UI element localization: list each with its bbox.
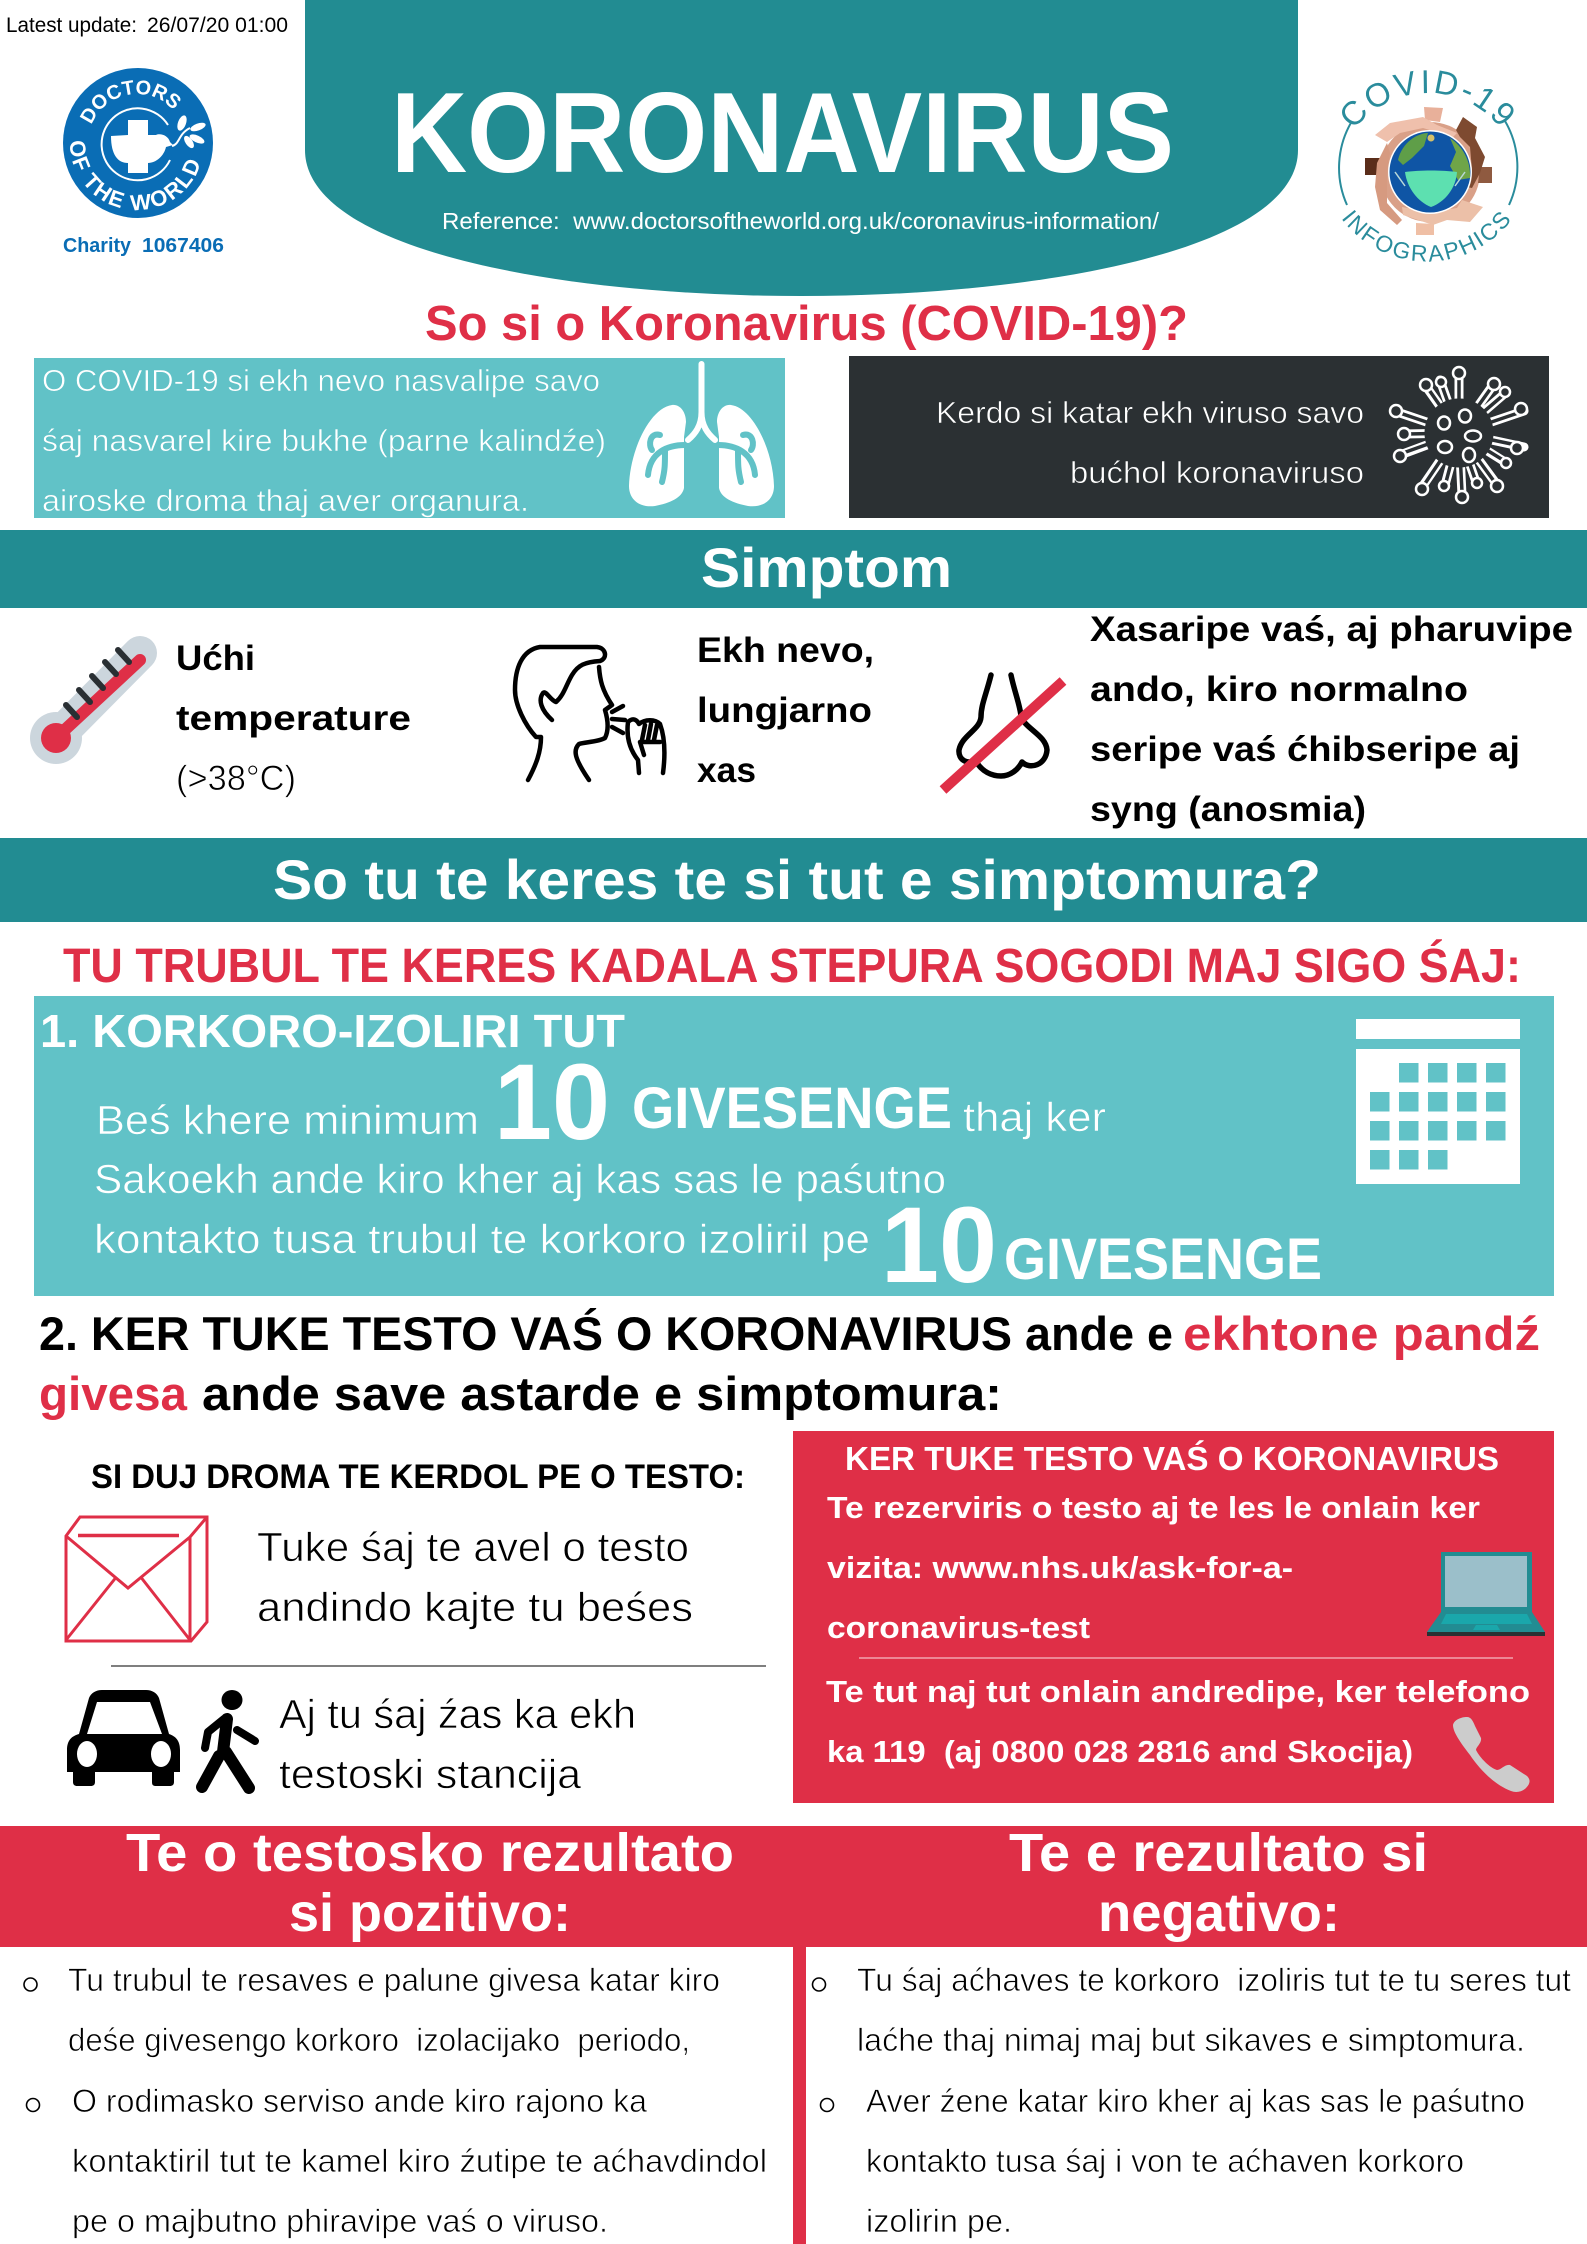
text block: negative result advice: kontakto tusa śaj i von te aćhaven korkoro	[866, 2143, 1464, 2179]
text: virus family: bućhol koronaviruso	[1070, 455, 1364, 490]
text: virus family: Kerdo si katar ekh viruso savo	[936, 395, 1364, 430]
text: loss of smell: syng (anosmia)	[1090, 790, 1366, 829]
latest update timestamp: 26/07/20 01:00	[147, 14, 288, 37]
charity number: 1067406	[142, 235, 224, 257]
text: phone 119	[826, 1674, 1530, 1769]
text: new cough: lungjarno	[697, 691, 872, 730]
text: high temperature: temperature	[176, 699, 411, 738]
step 1 text line 1: GIVESENGE	[632, 1076, 952, 1141]
text: home test: Tuke śaj te avel o testo	[257, 1524, 689, 1570]
reference line: Reference: www.doctorsoftheworld.org.uk/coronavirus-information/	[442, 208, 1160, 234]
panel: definition	[34, 358, 785, 518]
subheading: two ways to test: SI DUJ DROMA TE KERDOL PE O TESTO:	[91, 1458, 745, 1496]
text: phone 119: Te tut naj tut onlain andredipe, ker telefono	[826, 1674, 1530, 1709]
band: symptoms heading	[0, 530, 1587, 608]
text: home test: andindo kajte tu beśes	[257, 1584, 693, 1630]
charity number: Charity	[63, 235, 132, 257]
text: loss of smell	[1090, 610, 1573, 829]
icon: car	[67, 1690, 180, 1786]
latest update timestamp: Latest update:	[6, 14, 137, 37]
step 1 text line 1	[96, 1041, 1106, 1162]
option: home test kit	[66, 1517, 693, 1641]
text: book online	[827, 1490, 1480, 1645]
text: new cough: Ekh nevo,	[697, 631, 874, 670]
title: KORONAVIRUS	[391, 70, 1174, 197]
step 1 text line 1: Beś khere minimum	[96, 1097, 479, 1143]
band: symptoms heading: Simptom	[701, 536, 952, 599]
text: definition: airoske droma thaj aver organura.	[42, 483, 529, 518]
logo: COVID-19 infographics	[1338, 70, 1518, 262]
text block: negative result advice: Tu śaj aćhaves te korkoro izoliris tut te tu seres tut	[857, 1962, 1571, 1998]
text block: negative result advice: Aver źene katar kiro kher aj kas sas le paśutno	[866, 2083, 1525, 2119]
step 1 text line 2: Sakoekh ande kiro kher aj kas sas le paśutno	[94, 1156, 946, 1202]
text: definition: śaj nasvarel kire bukhe (parne kalindźe)	[42, 423, 606, 458]
heading: negative result: Te e rezultato si	[1009, 1823, 1428, 1883]
text: high temperature: Ućhi	[176, 639, 255, 678]
text block: positive result advice: deśe givesengo korkoro izolacijako periodo,	[68, 2022, 690, 2058]
logo: COVID-19 infographics: COVID-19	[1342, 70, 1514, 124]
panel: step 1 self-isolate	[34, 996, 1554, 1305]
step 1 text line 3: 10	[881, 1184, 997, 1305]
step 2 heading: ande save astarde e simptomura:	[202, 1367, 1002, 1420]
step 2 heading	[39, 1307, 1540, 1420]
text block: positive result advice: O rodimasko serviso ande kiro rajono ka	[72, 2083, 647, 2119]
icon: thermometer	[30, 650, 140, 764]
text: test station: testoski stancija	[279, 1751, 581, 1797]
text: home test	[257, 1524, 693, 1630]
icon: envelope box	[66, 1517, 207, 1641]
icon: calendar	[1356, 1019, 1520, 1184]
heading: negative result	[1009, 1823, 1428, 1943]
text: book online: Te rezerviris o testo aj te les le onlain ker	[827, 1490, 1480, 1525]
charity number	[63, 235, 224, 257]
text: definition	[42, 363, 606, 518]
logo: Doctors of the World: DOCTORS	[80, 80, 180, 124]
text: new cough: xas	[697, 751, 756, 790]
step 1 text line 3	[94, 1184, 1322, 1305]
option: test station	[67, 1690, 636, 1797]
band: what to do with symptoms: So tu te keres te si tut e simptomura?	[273, 848, 1321, 911]
text: loss of smell: seripe vaś ćhibseripe aj	[1090, 730, 1520, 769]
step 1 text line 3: GIVESENGE	[1004, 1227, 1322, 1292]
header banner	[305, 0, 1298, 296]
symptom: new cough	[515, 631, 874, 790]
text block: positive result advice: Tu trubul te resaves e palune givesa katar kiro	[68, 1962, 720, 1998]
symptom: loss of smell	[943, 610, 1573, 829]
section heading: what is coronavirus: So si o Koronavirus (COVID-19)?	[425, 297, 1188, 351]
text: high temperature: (>38°C)	[176, 759, 296, 798]
step 2 heading: ekhtone pandź	[1183, 1307, 1540, 1360]
heading: positive result	[126, 1823, 734, 1943]
icon: walking person	[202, 1690, 255, 1788]
heading: positive result: Te o testosko rezultato	[126, 1823, 734, 1883]
icon: laptop	[1427, 1552, 1545, 1636]
text: test station: Aj tu śaj źas ka ekh	[279, 1691, 636, 1737]
text block: negative result advice: laćhe thaj nimaj maj but sikaves e simptomura.	[857, 2022, 1525, 2058]
step 2 heading: 2. KER TUKE TESTO VAŚ O KORONAVIRUS ande e	[39, 1307, 1173, 1360]
icon: virus	[1390, 367, 1527, 503]
text: definition: O COVID-19 si ekh nevo nasvalipe savo	[42, 363, 600, 398]
text block: positive result advice: kontaktiril tut te kamel kiro źutipe te aćhavdindol	[72, 2143, 767, 2179]
latest update timestamp	[6, 14, 288, 37]
text block: positive result advice	[24, 1962, 767, 2239]
text block: negative result advice	[812, 1962, 1571, 2239]
text: virus family	[936, 395, 1364, 490]
step 1 heading: 1. KORKORO-IZOLIRI TUT	[40, 1005, 625, 1057]
heading: steps to take: TU TRUBUL TE KERES KADALA STEPURA SOGODI MAJ SIGO ŚAJ:	[63, 938, 1521, 993]
step 1 text line 1: 10	[494, 1041, 610, 1162]
band: result headings	[0, 1823, 1587, 1947]
heading: positive result: si pozitivo:	[289, 1883, 571, 1943]
band: what to do with symptoms	[0, 838, 1587, 922]
panel heading: KER TUKE TESTO VAŚ O KORONAVIRUS	[845, 1440, 1499, 1477]
step 2 heading: givesa	[39, 1367, 188, 1420]
text: phone 119: ka 119 (aj 0800 028 2816 and Skocija)	[827, 1734, 1413, 1769]
logo: Doctors of the World	[63, 68, 213, 218]
text block: positive result advice: pe o majbutno phiravipe vaś o viruso.	[72, 2203, 608, 2239]
logo: COVID-19 infographics: INFOGRAPHICS	[1342, 210, 1510, 262]
text block: negative result advice: izolirin pe.	[866, 2203, 1012, 2239]
heading: negative result: negativo:	[1098, 1883, 1340, 1943]
logo: Doctors of the World: OF THE WORLD	[70, 141, 199, 210]
icon: lungs	[629, 364, 774, 506]
text: new cough	[697, 631, 874, 790]
text: book online: coronavirus-test	[827, 1610, 1090, 1645]
text: loss of smell: ando, kiro normalno	[1090, 670, 1468, 709]
icon: telephone	[1453, 1717, 1530, 1792]
text: test station	[279, 1691, 636, 1797]
step 1 text line 1: thaj ker	[963, 1094, 1106, 1140]
text: book online: vizita: www.nhs.uk/ask-for-a-	[827, 1550, 1293, 1585]
panel: how to get a test	[793, 1431, 1554, 1803]
step 1 text line 3: kontakto tusa trubul te korkoro izoliril pe	[94, 1216, 870, 1262]
icon: coughing person	[515, 647, 664, 780]
text: loss of smell: Xasaripe vaś, aj pharuvipe	[1090, 610, 1573, 649]
symptom: high temperature	[30, 639, 411, 798]
icon: crossed-out nose	[943, 675, 1063, 790]
text: high temperature	[176, 639, 411, 798]
panel: virus family	[849, 356, 1549, 518]
